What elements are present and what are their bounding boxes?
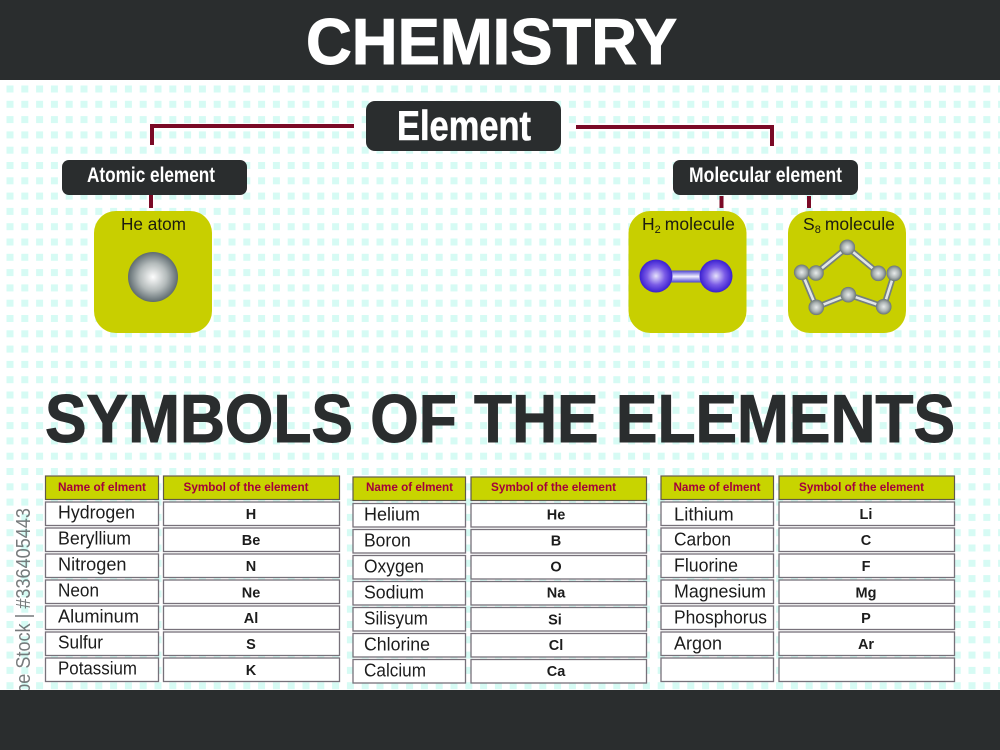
heading: atomic element <box>62 160 247 195</box>
table 3: C <box>861 533 872 549</box>
panel: He atom: He atom <box>121 214 186 234</box>
table 1: Nitrogen <box>58 554 126 574</box>
table 2: Helium <box>364 504 420 524</box>
table 3: Carbon <box>674 530 731 550</box>
table 3: F <box>862 559 871 575</box>
table 3: Mg <box>856 586 876 602</box>
table 1: Al <box>244 611 258 627</box>
vertical stock id text: Adobe Stock | #336405443 <box>13 508 35 726</box>
table 2: Symbol of the element <box>491 482 616 494</box>
top banner <box>0 0 1000 80</box>
table 2: Cl <box>549 638 563 654</box>
table 2: Silisyum <box>364 608 428 628</box>
panel: S8 molecule <box>788 211 906 333</box>
table 2: Na <box>547 586 566 602</box>
table 2: Calcium <box>364 660 426 680</box>
table 1: Neon <box>58 580 99 600</box>
table 3 <box>661 476 954 682</box>
panel: H2 molecule: 2 <box>655 224 661 236</box>
panel: H2 molecule: molecule <box>665 214 735 234</box>
table 2: Sodium <box>364 582 424 602</box>
table 2: Si <box>548 612 562 628</box>
table 3: Lithium <box>674 504 734 524</box>
table 2: Name of elment <box>366 482 453 494</box>
icon: H2 molecule <box>640 260 732 292</box>
table 3: Name of elment <box>674 482 761 494</box>
table 3: Phosphorus <box>674 608 767 628</box>
table 2: Chlorine <box>364 634 430 654</box>
table 1: Hydrogen <box>58 502 135 522</box>
heading: atomic element: Atomic element <box>87 164 215 187</box>
table 2: B <box>551 534 561 550</box>
heading: molecular element: Molecular element <box>689 164 842 187</box>
table 1: Aluminum <box>58 606 139 626</box>
table 1: Symbol of the element <box>184 482 309 494</box>
table 1: K <box>246 663 257 679</box>
table 1: Sulfur <box>58 632 103 652</box>
table 1: H <box>246 507 256 523</box>
table 1: Name of elment <box>58 482 146 494</box>
icon: S8 molecule <box>794 240 902 315</box>
connector: element to molecular element <box>576 127 772 146</box>
table 3: Argon <box>674 634 722 654</box>
table 1: Beryllium <box>58 528 131 548</box>
table 3: Symbol of the element <box>799 482 924 494</box>
table 3: P <box>861 611 871 627</box>
table 2: O <box>550 560 562 576</box>
table 2 <box>353 477 646 683</box>
panel: S8 molecule: molecule <box>825 214 895 234</box>
table 1: Be <box>242 533 260 549</box>
table 3: Ar <box>858 637 874 653</box>
panel: S8 molecule: S <box>803 214 815 234</box>
connector: atomic element to He atom <box>149 195 153 208</box>
icon: helium atom sphere <box>128 252 178 302</box>
table 1: N <box>246 559 256 575</box>
table 1: S <box>246 637 256 653</box>
connector: molecular element to H2 <box>720 196 724 208</box>
table 2: Ca <box>547 664 566 680</box>
panel: He atom <box>94 211 212 333</box>
connector: molecular element to S8 <box>807 196 811 208</box>
table 1 <box>46 476 340 682</box>
table 1: Potassium <box>58 658 137 678</box>
table 3: Magnesium <box>674 582 766 602</box>
heading: molecular element <box>673 160 858 195</box>
panel: H2 molecule <box>628 211 746 333</box>
table 2: Oxygen <box>364 556 424 576</box>
table 2: He <box>547 508 565 524</box>
table 2: Boron <box>364 530 411 550</box>
title: CHEMISTRY <box>306 5 677 78</box>
panel: H2 molecule: H <box>642 214 655 234</box>
table 3: Li <box>860 507 872 523</box>
table 1: Ne <box>242 586 260 602</box>
heading: element: Element <box>397 102 531 149</box>
bottom banner <box>0 690 1000 750</box>
panel: S8 molecule: 8 <box>815 224 821 236</box>
table 3: Fluorine <box>674 556 738 576</box>
connector: element to atomic element <box>152 126 354 145</box>
